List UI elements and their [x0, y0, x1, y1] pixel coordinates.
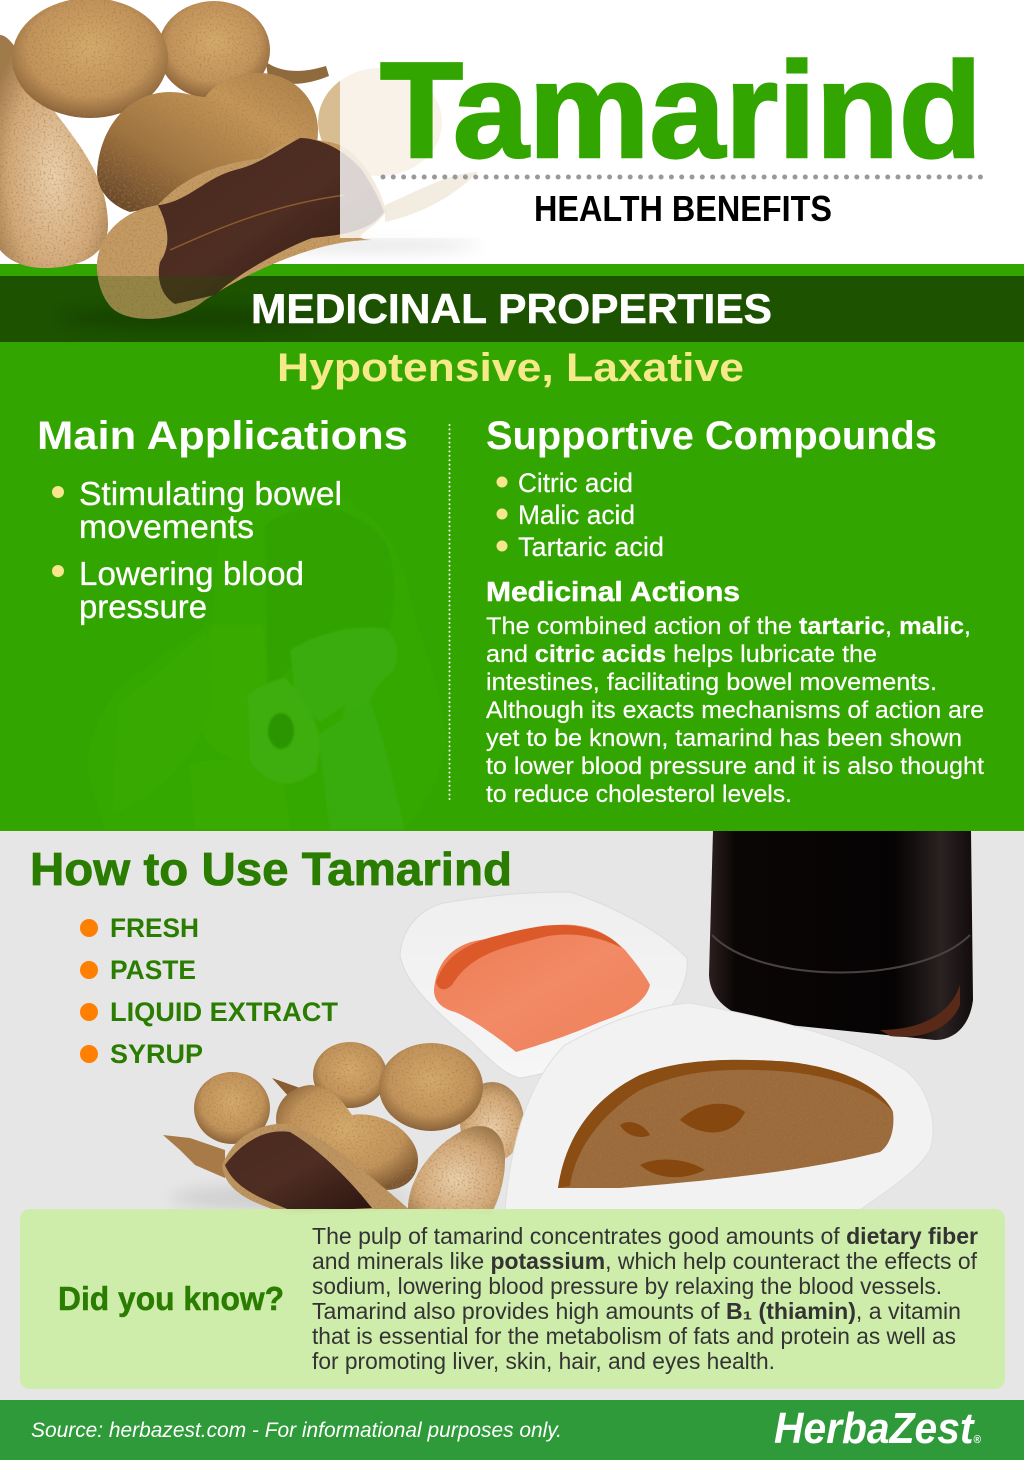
- text block: medicinal actions: intestines, facilitating bowel movements.: [486, 669, 937, 696]
- text block: medicinal actions: Although its exacts mechanisms of action are: [486, 697, 984, 724]
- heading: medicinal properties: MEDICINAL PROPERTIES: [251, 285, 772, 332]
- dotted column separator: [448, 425, 450, 802]
- dark band: medicinal properties: [0, 276, 1024, 342]
- heading: main applications: Main Applications: [37, 414, 408, 458]
- panel: medicinal properties background: [0, 264, 1024, 831]
- list: forms of use: LIQUID EXTRACT: [110, 997, 339, 1027]
- heading: how to use tamarind: How to Use Tamarind: [30, 843, 512, 895]
- list: forms of use: SYRUP: [110, 1039, 203, 1069]
- text block: did you know: Tamarind also provides high amounts of B₁ (thiamin), a vitamin: [312, 1298, 961, 1324]
- dotted divider: [383, 174, 986, 180]
- heading: medicinal actions: Medicinal Actions: [486, 576, 740, 607]
- panel: did you know: [20, 1209, 1005, 1389]
- text block: did you know: sodium, lowering blood pressure by relaxing the blood vessels.: [312, 1273, 942, 1299]
- text block: medicinal actions: to reduce cholesterol levels.: [486, 781, 792, 808]
- bullet list: compounds: Malic acid: [518, 500, 635, 530]
- subtitle: HEALTH BENEFITS: [534, 188, 832, 229]
- heading: supportive compounds: Supportive Compounds: [486, 414, 937, 458]
- text block: did you know: and minerals like potassium, which help counteract the effects of: [312, 1248, 978, 1274]
- source note: Source: herbazest.com - For informational purposes only.: [31, 1419, 562, 1442]
- logo: HerbaZest: HerbaZest®: [774, 1404, 981, 1453]
- list: forms of use: PASTE: [110, 955, 196, 985]
- dark band shade over pod: [97, 276, 240, 319]
- image: tamarind pods header: [0, 0, 480, 328]
- title: Tamarind: [380, 34, 982, 186]
- column: main applications: [37, 414, 408, 625]
- text block: medicinal actions: and citric acids helps lubricate the: [486, 641, 877, 668]
- heading: did you know: Did you know?: [58, 1280, 284, 1317]
- text block: did you know: that is essential for the metabolism of fats and protein as well as: [312, 1323, 956, 1349]
- image: fading pod stem: [385, 172, 478, 222]
- list: forms of use: [80, 913, 339, 1069]
- column: supportive compounds: [486, 414, 984, 808]
- image: bowl of tamarind paste: [505, 1003, 933, 1210]
- bullet list: applications: Lowering blood: [79, 555, 304, 592]
- bullet list: applications: Stimulating bowel: [79, 475, 342, 512]
- list: forms of use: FRESH: [110, 913, 199, 943]
- text block: medicinal actions: yet to be known, tamarind has been shown: [486, 725, 962, 752]
- bullet list: compounds: Citric acid: [518, 468, 633, 498]
- bullet list: applications: movements: [79, 508, 254, 545]
- text block: did you know: The pulp of tamarind concentrates good amounts of dietary fiber: [312, 1223, 978, 1249]
- panel: how to use background: [0, 831, 1024, 1400]
- text block: did you know: [312, 1223, 978, 1374]
- header white overlay: [340, 0, 1024, 238]
- image: bowl of orange liquid: [400, 892, 687, 1078]
- image: tamarind pods group: [163, 1042, 524, 1215]
- footer bar: [0, 1400, 1024, 1460]
- bullet list: applications: pressure: [79, 588, 207, 625]
- image: syrup bottle: [709, 831, 973, 1040]
- text block: did you know: for promoting liver, skin, hair, and eyes health.: [312, 1348, 775, 1374]
- illustration: person holding toilet roll: [88, 496, 446, 830]
- text block: medicinal actions: to lower blood pressure and it is also thought: [486, 753, 984, 780]
- text block: medicinal actions: [486, 613, 984, 808]
- bullet list: compounds: Tartaric acid: [518, 532, 664, 562]
- sub-heading: hypotensive, laxative: Hypotensive, Laxative: [277, 346, 744, 390]
- bullet list: compounds: [496, 468, 664, 562]
- text block: medicinal actions: The combined action of the tartaric, malic,: [486, 613, 971, 640]
- bullet list: applications: [52, 475, 342, 625]
